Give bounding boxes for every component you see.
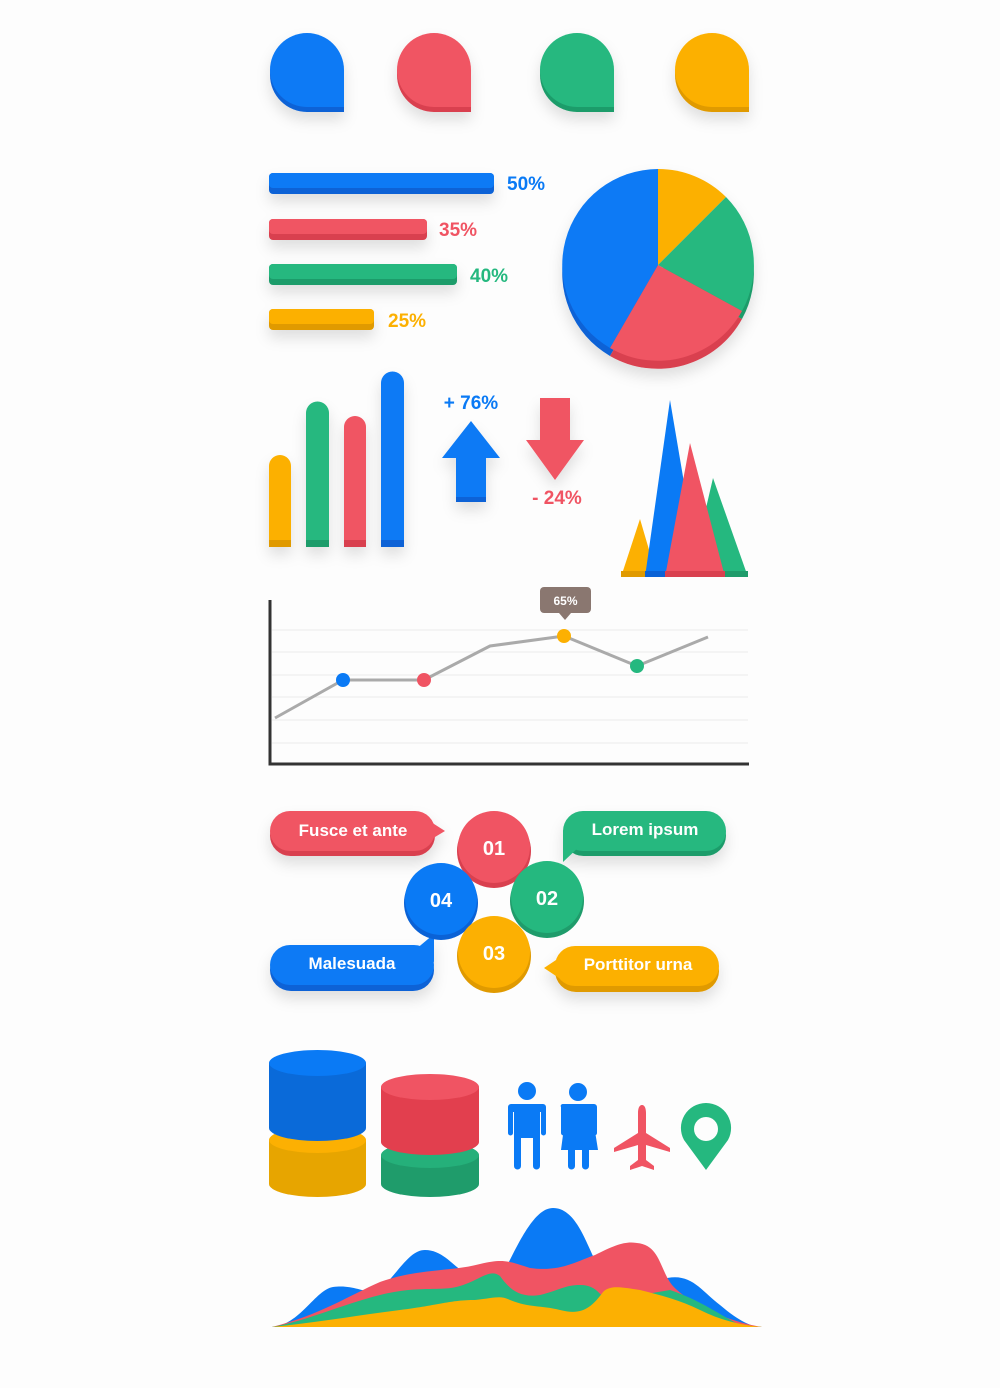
icon: plane	[614, 1105, 670, 1170]
horizontal bar chart: 35%	[439, 220, 477, 241]
line chart	[270, 587, 749, 764]
circle 04	[404, 863, 478, 940]
bubble: Lorem ipsum: Lorem ipsum	[592, 820, 698, 839]
arrow down -24%	[526, 398, 584, 509]
circle 01: 01	[483, 838, 505, 860]
horizontal bar chart: 50%	[507, 174, 545, 195]
drop: red	[397, 33, 471, 112]
horizontal bar chart	[269, 173, 545, 332]
circle 02: 02	[536, 888, 558, 910]
arrow up +76%: + 76%	[444, 393, 498, 414]
arrow down -24%: - 24%	[532, 488, 582, 509]
circle 03: 03	[483, 943, 505, 965]
circle 01	[457, 811, 531, 888]
circle 04: 04	[430, 890, 453, 912]
drop: blue	[270, 33, 344, 112]
circle 02	[510, 861, 584, 938]
bubble: Porttitor urna: Porttitor urna	[584, 955, 693, 974]
icon: woman	[561, 1083, 598, 1170]
bubble: Fusce et ante	[270, 811, 445, 856]
icon: man	[508, 1082, 546, 1170]
horizontal bar chart: 40%	[470, 266, 508, 287]
drop: green	[540, 33, 614, 112]
cylinder: red/green	[381, 1074, 479, 1197]
vertical bar chart	[269, 372, 404, 547]
process flow	[270, 811, 726, 993]
arrow up +76%	[442, 393, 500, 502]
bubble: Porttitor urna	[544, 946, 719, 992]
drop: yellow	[675, 33, 749, 112]
triangle chart	[621, 400, 748, 577]
bubble: Malesuada: Malesuada	[309, 954, 396, 973]
cylinder: blue/yellow	[269, 1050, 366, 1197]
tooltip 65%: 65%	[553, 594, 578, 608]
pie chart	[562, 169, 754, 369]
tooltip 65%	[540, 587, 591, 620]
horizontal bar chart: 25%	[388, 311, 426, 332]
area chart mountains	[272, 1208, 762, 1327]
drops row	[270, 33, 749, 112]
icon: location pin	[681, 1103, 731, 1170]
bubble: Malesuada	[270, 934, 434, 991]
bubble: Lorem ipsum	[563, 811, 726, 862]
bubble: Fusce et ante: Fusce et ante	[299, 821, 407, 840]
circle 03	[457, 916, 531, 993]
